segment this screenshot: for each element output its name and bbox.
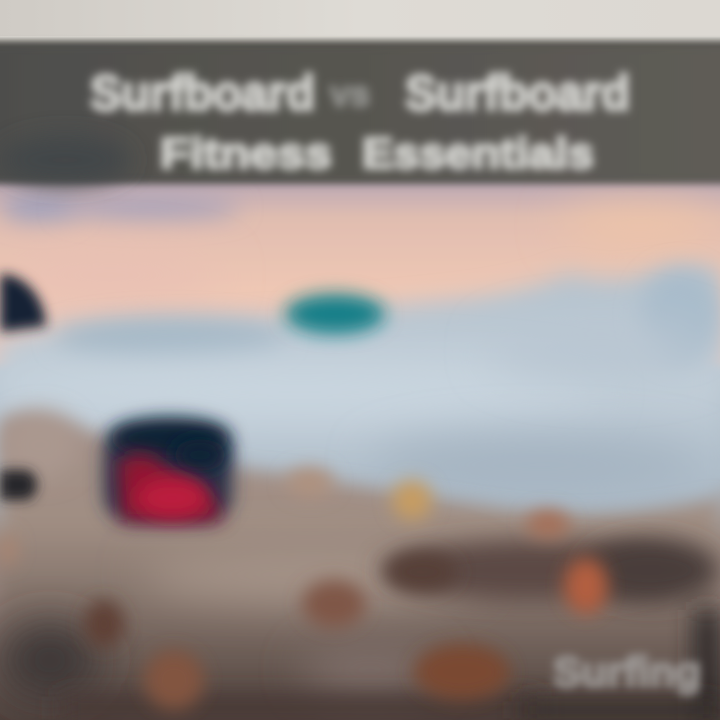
top light strip bbox=[0, 0, 720, 36]
title band bbox=[0, 44, 720, 184]
red and navy bag bbox=[104, 418, 232, 522]
sky bbox=[0, 176, 720, 366]
watermark logo: Surfing bbox=[553, 648, 701, 695]
title: Surfboard bbox=[90, 65, 315, 121]
teal surfboard bbox=[285, 294, 385, 334]
sand beach bbox=[0, 411, 720, 720]
ocean wave bbox=[0, 267, 720, 530]
title: Essentials bbox=[362, 129, 594, 178]
title: Fitness bbox=[160, 129, 332, 178]
title bbox=[90, 65, 630, 178]
title: vs bbox=[330, 73, 370, 114]
dark headland left bbox=[0, 274, 46, 332]
orange shells bbox=[0, 467, 608, 710]
dark rocks bbox=[0, 470, 720, 720]
title: Surfboard bbox=[405, 65, 630, 121]
